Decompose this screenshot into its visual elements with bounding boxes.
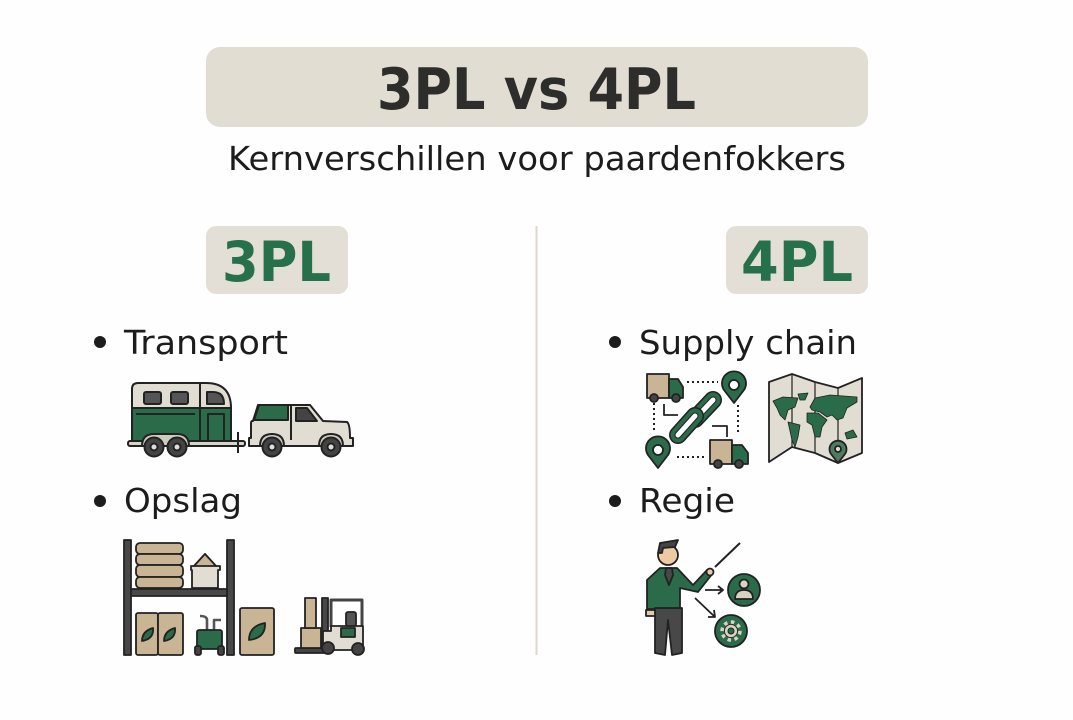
icon: supply chain network xyxy=(646,371,748,468)
bullet: Regie: Regie xyxy=(639,481,735,520)
icon: warehouse rack with feed sacks and forklift xyxy=(124,540,364,655)
bullet: Opslag: Opslag xyxy=(124,481,242,520)
icon: manager directing people and processes xyxy=(646,540,760,655)
icon: world map xyxy=(769,374,862,463)
icon: horse trailer and pickup xyxy=(128,383,353,456)
subtitle: Kernverschillen voor paardenfokkers xyxy=(228,139,846,178)
3PL heading: 3PL xyxy=(222,230,331,294)
bullet: Supply chain: Supply chain xyxy=(639,323,857,362)
4PL heading: 4PL xyxy=(741,230,853,294)
title banner xyxy=(206,47,868,127)
title banner: 3PL vs 4PL xyxy=(377,57,696,123)
bullet: Transport: Transport xyxy=(123,323,288,362)
